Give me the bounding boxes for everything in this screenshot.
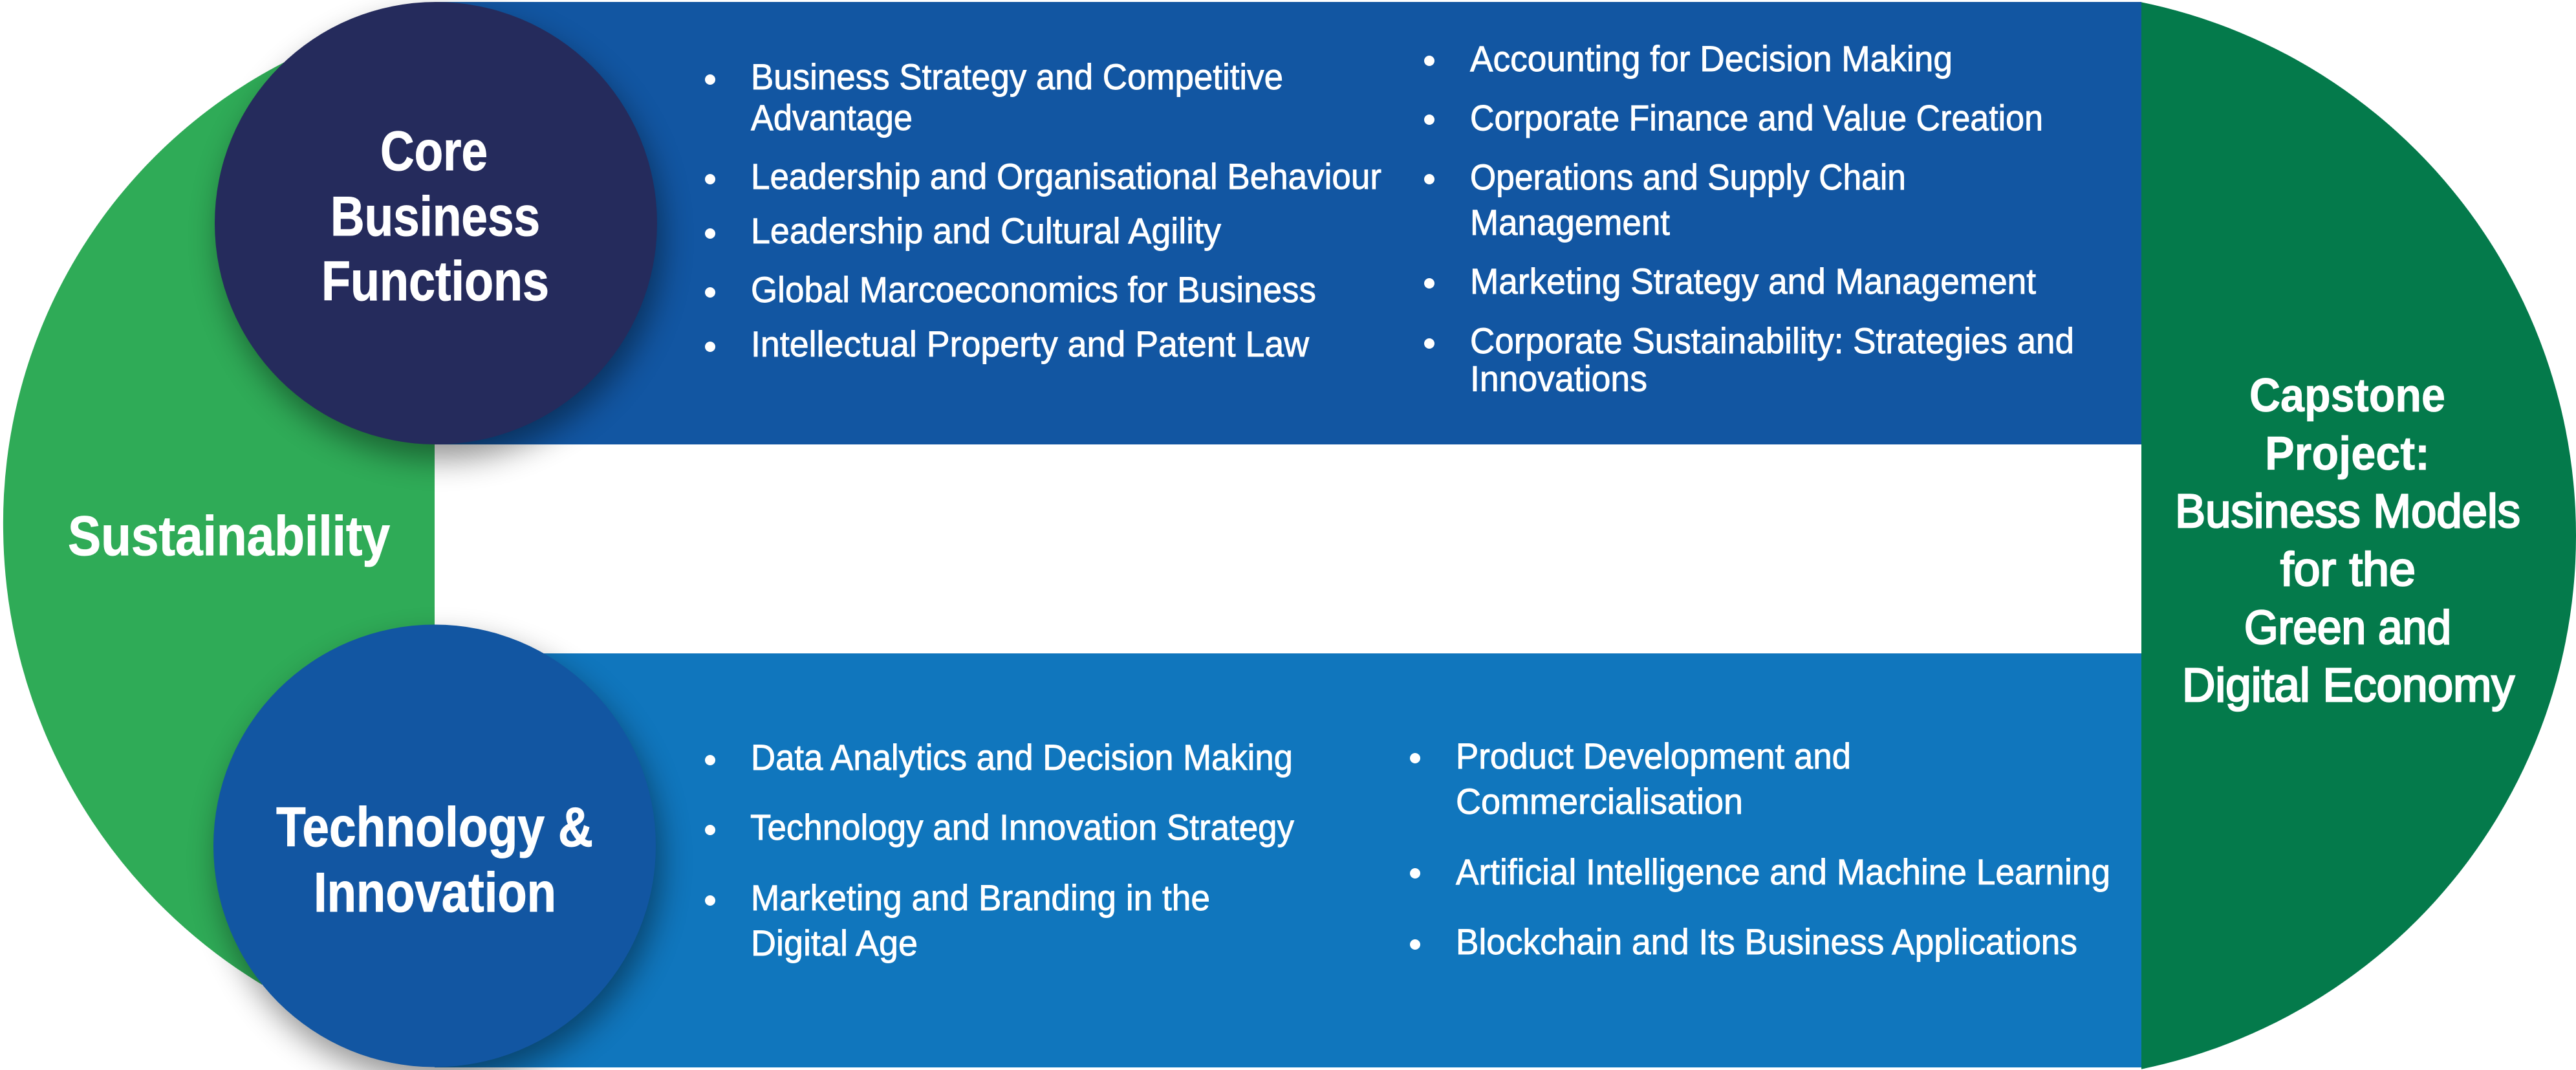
- item: Business Strategy: Advantage: [751, 97, 913, 138]
- text block: Capstone Project title: Digital Economy: [2182, 659, 2515, 712]
- item: Corporate Sustainability: Corporate Sustainability: Strategies and: [1470, 320, 2074, 361]
- item: Artificial Intelligence: Artificial Intelligence and Machine Learning: [1456, 851, 2110, 892]
- text block: Capstone Project title: [2175, 369, 2520, 712]
- panel: Capstone Project green arc: [2141, 2, 2576, 1069]
- item: Operations and Supply Chain: [1424, 157, 1906, 243]
- heading: Sustainability: Sustainability: [68, 505, 390, 567]
- item: Marketing and Branding: Digital Age: [751, 923, 918, 963]
- item: Operations and Supply Chain: Management: [1470, 202, 1670, 243]
- item: Blockchain: Blockchain and Its Business Applications: [1456, 921, 2077, 962]
- panel: Technology and Innovation band: [435, 653, 2141, 1067]
- item: Marketing and Branding: [705, 877, 1210, 963]
- item: Global Marcoeconomics: Global Marcoeconomics for Business: [751, 269, 1316, 310]
- item: Business Strategy: [705, 56, 1283, 138]
- item: Accounting: Accounting for Decision Making: [1470, 38, 1953, 79]
- item: Corporate Sustainability: Innovations: [1470, 358, 1647, 399]
- circle: Core Business Functions: Business: [330, 186, 540, 248]
- list: core functions column two: [1424, 38, 2074, 399]
- circle: Core Business Functions: Functions: [321, 250, 549, 312]
- item: Leadership and Organisational Behaviour: Leadership and Organisational Behaviour: [751, 156, 1381, 197]
- item: Leadership and Cultural Agility: Leadership and Cultural Agility: [751, 210, 1221, 251]
- circle: Technology and Innovation: [213, 625, 661, 1070]
- list: core functions column one: [705, 56, 1381, 364]
- item: Corporate Finance: Corporate Finance and Value Creation: [1470, 97, 2043, 138]
- item: Intellectual Property: Intellectual Property and Patent Law: [751, 323, 1310, 364]
- item: Operations and Supply Chain: Operations and Supply Chain: [1470, 157, 1906, 197]
- item: Data Analytics: Data Analytics and Decision Making: [751, 737, 1293, 778]
- panel: Sustainability green arc: [3, 62, 435, 985]
- item: Product Development: [1410, 736, 1851, 822]
- circle: Core Business Functions: Core: [380, 120, 488, 182]
- item: Marketing and Branding: Marketing and Branding in the: [751, 877, 1210, 918]
- item: Business Strategy: Business Strategy and Competitive: [751, 56, 1283, 97]
- list: technology column two: [1410, 736, 2110, 962]
- text block: Capstone Project title: Green and: [2244, 602, 2451, 654]
- text block: Capstone Project title: Capstone: [2249, 369, 2445, 422]
- circle: Technology and Innovation: Innovation: [314, 862, 556, 924]
- text block: Capstone Project title: for the: [2280, 543, 2416, 596]
- list: technology column one: [705, 737, 1294, 963]
- circle: Core Business Functions: [215, 2, 662, 459]
- text block: Capstone Project title: Business Models: [2175, 485, 2520, 538]
- item: Marketing Strategy: Marketing Strategy and Management: [1470, 261, 2036, 301]
- item: Product Development: Product Development and: [1456, 736, 1851, 776]
- item: Corporate Sustainability: [1424, 320, 2074, 399]
- circle: Technology and Innovation: Technology &: [276, 796, 593, 858]
- text block: Capstone Project title: Project:: [2265, 428, 2430, 480]
- panel: Core Business Functions band: [435, 2, 2141, 444]
- item: Technology and Innovation Strategy: Technology and Innovation Strategy: [750, 807, 1294, 847]
- item: Product Development: Commercialisation: [1456, 781, 1743, 822]
